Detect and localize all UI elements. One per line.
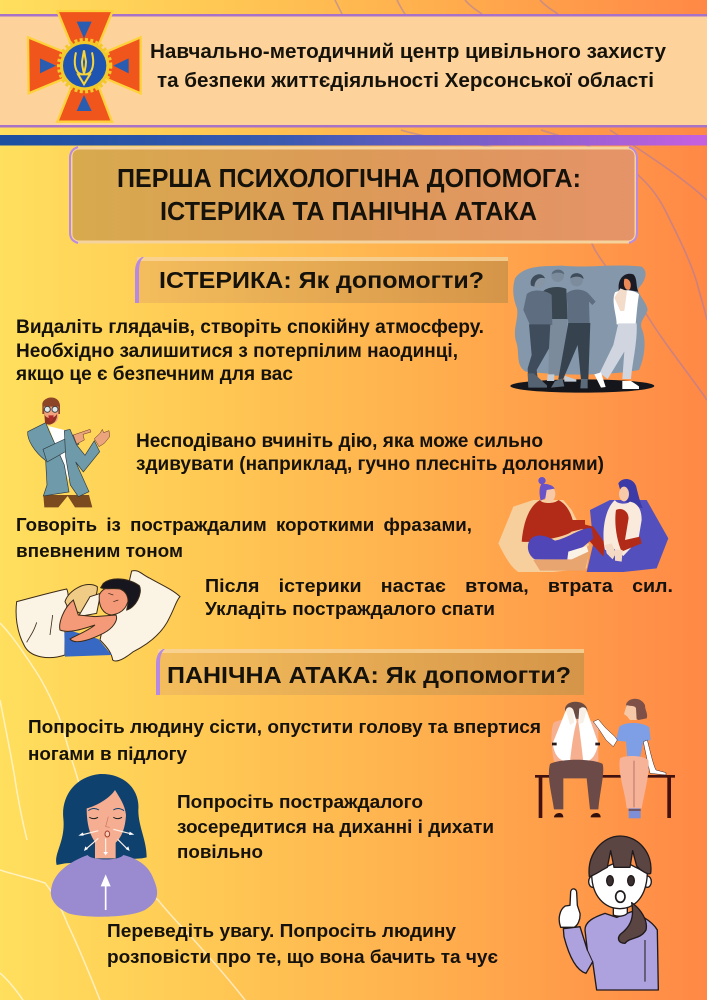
illustration: two people on a bench [535, 699, 675, 818]
illustration: two people on bean bags [498, 477, 668, 572]
heading: panic attack: ПАНІЧНА АТАКА: Як допомогти? [167, 662, 571, 688]
text block: remove onlookers: Видаліть глядачів, створіть спокійну атмосферу. [16, 317, 484, 338]
text block: remove onlookers: Необхідно залишитися з потерпілим наодинці, [16, 341, 458, 362]
header text: Навчально-методичний центр цивільного захисту [150, 41, 667, 63]
text block: short phrases [16, 514, 472, 561]
text block: short phrases: впевненим тоном [16, 540, 183, 561]
distressed woman [594, 274, 639, 389]
text block: shift attention: Переведіть увагу. Попросіть людину [107, 920, 457, 941]
title: ІСТЕРИКА ТА ПАНІЧНА АТАКА [160, 198, 537, 226]
text block: fatigue: Після істерики настає втома, втрата сил. [205, 575, 673, 596]
icon: civil protection emblem [28, 11, 141, 122]
illustration: sleeping person [16, 571, 180, 661]
illustration: onlookers and distressed woman [510, 265, 654, 393]
text block: sit down: Попросіть людину сісти, опустити голову та впертися [28, 716, 541, 737]
person A [523, 274, 552, 388]
gradient bar [0, 135, 707, 146]
heading: panic attack [156, 649, 584, 695]
text block: sudden action [136, 431, 604, 475]
title panel [70, 147, 637, 243]
person C [551, 273, 596, 388]
text block: sudden action: Несподівано вчиніть дію, яка може сильно [136, 431, 543, 452]
heading: hysteria [135, 257, 508, 303]
header text [150, 41, 667, 92]
header band [0, 14, 707, 128]
illustration: girl with raised finger [559, 836, 658, 990]
header text: та безпеки життєдіяльності Херсонської області [157, 70, 654, 92]
text block: remove onlookers: якщо це є безпечним для вас [15, 364, 293, 385]
text block: sudden action: здивувати (наприклад, гучно плесніть долонями) [136, 454, 604, 475]
heading: hysteria: ІСТЕРИКА: Як допомогти? [159, 267, 484, 293]
text block: remove onlookers [15, 317, 484, 385]
illustration: surprised man pointing [28, 397, 110, 507]
text block: breathing: зосередитися на диханні і дихати [177, 816, 494, 837]
person B [543, 269, 576, 382]
text block: fatigue [205, 575, 673, 619]
text block: shift attention: розповісти про те, що вона бачить та чує [107, 946, 498, 967]
text block: fatigue: Укладіть постраждалого спати [205, 598, 495, 619]
title: ПЕРША ПСИХОЛОГІЧНА ДОПОМОГА: [117, 165, 581, 193]
text block: sit down [28, 716, 541, 764]
illustration: woman breathing [51, 774, 157, 917]
text block: sit down: ногами в підлогу [28, 743, 188, 764]
text block: breathing: повільно [177, 841, 263, 862]
text block: shift attention [107, 920, 498, 967]
text block: short phrases: Говоріть із постраждалим короткими фразами, [16, 514, 472, 535]
text block: breathing: Попросіть постраждалого [177, 791, 423, 812]
title [117, 165, 581, 226]
text block: breathing [177, 791, 494, 862]
